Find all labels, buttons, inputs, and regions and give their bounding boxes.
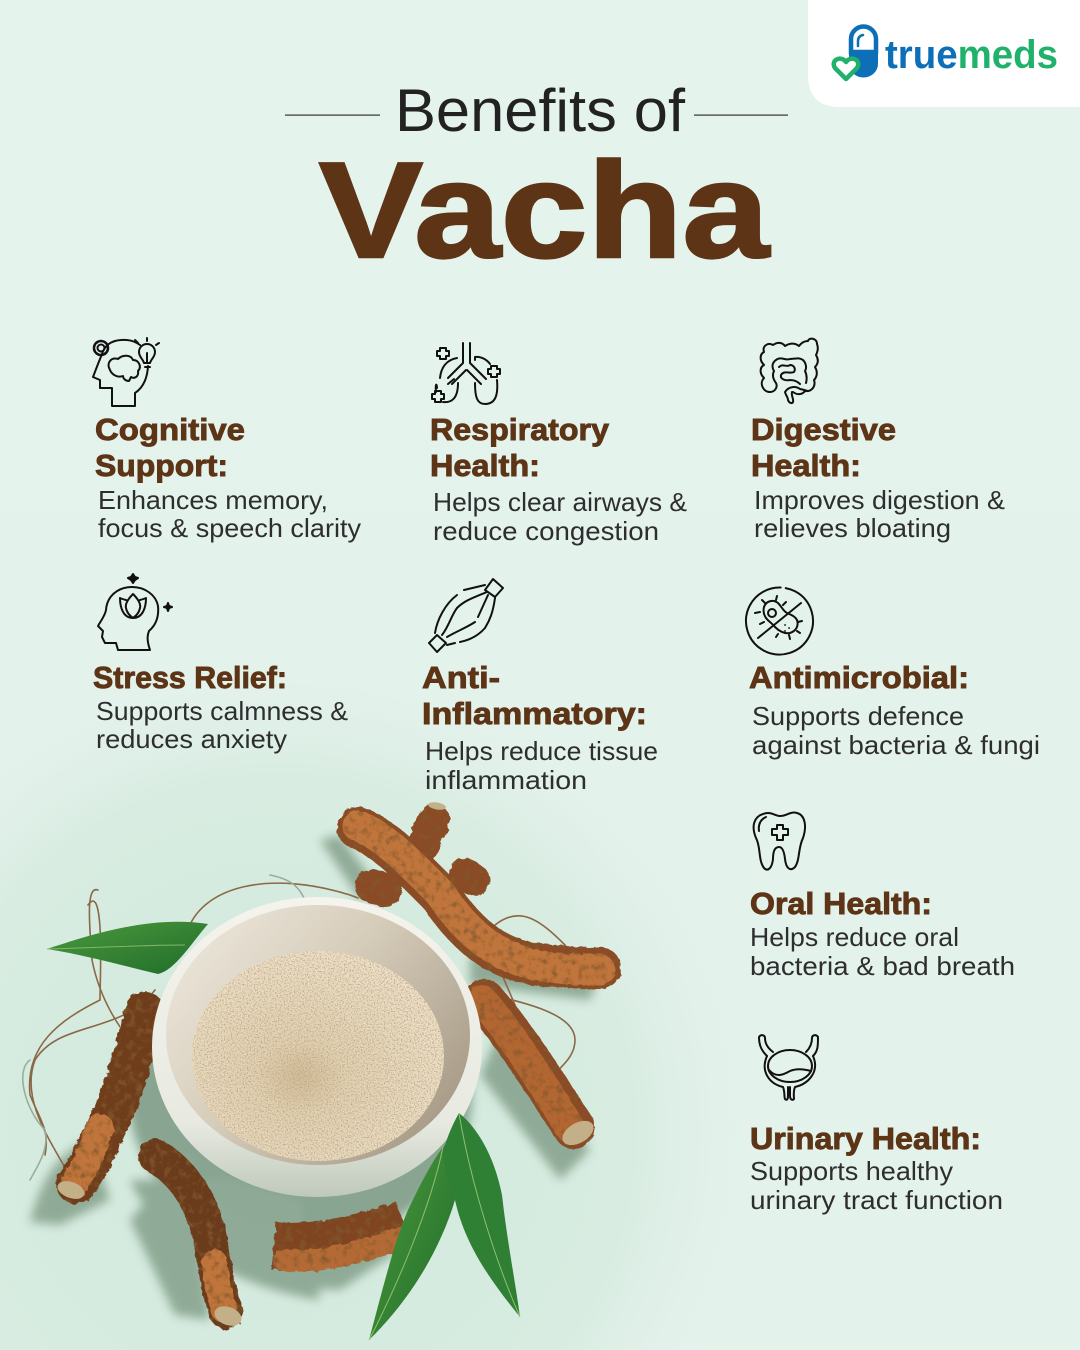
heading: Stress Relief:	[93, 660, 287, 695]
text: reduces anxiety	[96, 724, 287, 754]
title: Benefits of	[395, 77, 685, 144]
icon: bladder	[759, 1035, 818, 1100]
text: Helps reduce tissue	[425, 736, 658, 766]
heading: Cognitive	[95, 412, 245, 447]
heading: Inflammatory:	[422, 696, 647, 731]
heading: Respiratory	[430, 412, 610, 447]
title: Vacha	[319, 134, 771, 286]
leaf: left	[47, 922, 208, 974]
heading: Health:	[751, 448, 861, 483]
text: bacteria & bad breath	[750, 951, 1015, 981]
icon: head with gear and bulb	[93, 338, 159, 406]
shadows	[30, 835, 600, 1320]
panel: cognitive support	[93, 338, 361, 543]
panel: stress relief	[93, 574, 348, 754]
leaves: bottom	[369, 1113, 520, 1340]
text: inflammation	[425, 765, 587, 795]
text: relieves bloating	[754, 513, 951, 543]
photo: vacha powder in bowl with roots and leaves	[23, 801, 600, 1340]
panel: anti-inflammatory	[422, 579, 658, 795]
text	[96, 696, 348, 754]
dark root bodies	[76, 820, 600, 1312]
heading	[422, 660, 647, 731]
text: Supports calmness &	[96, 696, 348, 726]
title	[285, 77, 788, 286]
heading: Urinary Health:	[750, 1121, 981, 1156]
text: Enhances memory,	[98, 485, 328, 515]
text: reduce congestion	[433, 516, 659, 546]
panel: oral health	[750, 813, 1015, 981]
text: Supports defence	[752, 701, 964, 731]
root cut ends	[55, 801, 598, 1329]
text: urinary tract function	[750, 1185, 1003, 1215]
logo: truemeds	[808, 0, 1080, 107]
lit root surfaces	[76, 826, 600, 1310]
text: against bacteria & fungi	[752, 730, 1040, 760]
text	[752, 701, 1040, 760]
heading	[95, 412, 245, 483]
text	[98, 485, 361, 543]
icon: capsule	[834, 26, 878, 79]
text: Improves digestion &	[754, 485, 1005, 515]
text	[750, 922, 1015, 981]
panel: antimicrobial	[734, 576, 1040, 760]
panel: digestive health	[751, 339, 1005, 543]
powder	[192, 951, 444, 1161]
panel: urinary health	[750, 1035, 1003, 1215]
fine rootlets	[23, 875, 575, 1185]
panel: respiratory health	[430, 343, 687, 546]
text: Supports healthy	[750, 1156, 953, 1186]
text: Helps reduce oral	[750, 922, 959, 952]
text	[754, 485, 1005, 543]
text: focus & speech clarity	[98, 513, 361, 543]
heading: Anti-	[422, 660, 500, 695]
heading	[430, 412, 610, 483]
heading: Oral Health:	[750, 886, 932, 921]
heading: Support:	[95, 448, 228, 483]
heading: Health:	[430, 448, 540, 483]
heading: Antimicrobial:	[749, 660, 969, 695]
heading	[751, 412, 896, 483]
bowl	[152, 897, 482, 1197]
icon: head with lotus	[98, 574, 172, 650]
icon: lungs	[432, 343, 500, 404]
icon: intestines	[761, 339, 818, 403]
text	[750, 1156, 1003, 1215]
logo wordmark: truemeds	[885, 33, 1058, 77]
text	[433, 487, 687, 546]
icon: crossed-out bacteria	[734, 576, 825, 666]
icon: tooth	[754, 813, 805, 870]
text: Helps clear airways &	[433, 487, 687, 517]
roots	[76, 820, 600, 1312]
icon: muscle	[429, 579, 503, 652]
heading: Digestive	[751, 412, 896, 447]
text	[425, 736, 658, 795]
